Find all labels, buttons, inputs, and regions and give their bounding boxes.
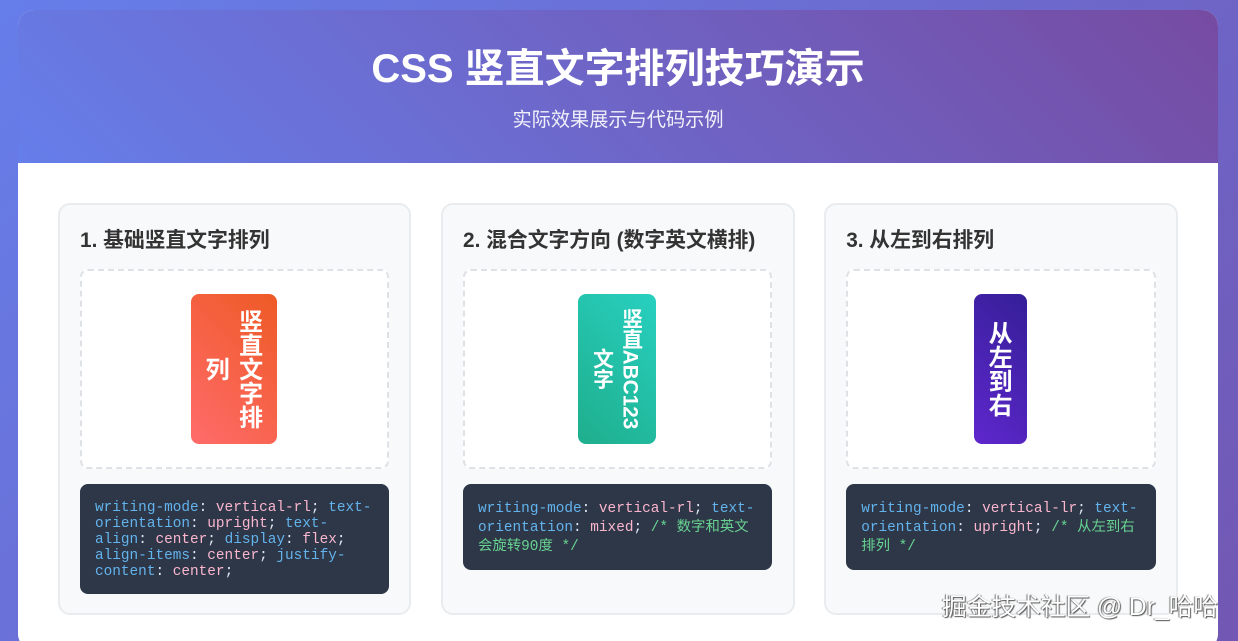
code block: align-items: center; justify-	[95, 548, 345, 564]
code block: align: center; display: flex;	[95, 532, 346, 548]
code block: 排列 */	[861, 539, 916, 555]
code block: content: center;	[95, 564, 233, 580]
watermark: 掘金技术社区 @ Dr_哈哈	[942, 594, 1218, 621]
vertical text sample: orange	[191, 294, 277, 444]
vertical text sample: purple: 从左到右	[984, 321, 1011, 417]
code block	[846, 484, 1156, 570]
code block: writing-mode: vertical-rl; text-	[95, 500, 371, 516]
code block: orientation: upright; /* 从左到右	[861, 520, 1135, 536]
code block: writing-mode: vertical-lr; text-	[861, 501, 1138, 517]
vertical text sample: teal: 竖直ABC123	[619, 308, 642, 430]
panel heading: 1. 基础竖直文字排列	[80, 229, 270, 252]
code block: orientation: upright; text-	[95, 516, 328, 532]
demo area	[846, 269, 1156, 469]
vertical text sample: orange: 竖直文字排	[235, 309, 262, 429]
vertical text sample: teal: 文字	[590, 348, 613, 390]
code block	[80, 484, 389, 594]
code block	[463, 484, 772, 570]
panel: left to right	[824, 203, 1178, 615]
panel: basic vertical text	[58, 203, 411, 615]
demo area	[80, 269, 389, 469]
demo area	[463, 269, 772, 469]
code block: writing-mode: vertical-rl; text-	[478, 501, 754, 517]
subtitle: 实际效果展示与代码示例	[512, 110, 724, 131]
title: CSS 竖直文字排列技巧演示	[371, 47, 865, 91]
panel heading: 2. 混合文字方向 (数字英文横排)	[463, 229, 755, 252]
panel heading: 3. 从左到右排列	[846, 229, 994, 252]
vertical text sample: orange: 列	[201, 357, 228, 381]
code block: orientation: mixed; /* 数字和英文	[478, 520, 749, 536]
panel: mixed orientation	[441, 203, 795, 615]
header banner	[18, 10, 1218, 163]
vertical text sample: teal	[578, 294, 656, 444]
code block: 会旋转90度 */	[478, 539, 579, 555]
vertical text sample: purple	[974, 294, 1027, 444]
